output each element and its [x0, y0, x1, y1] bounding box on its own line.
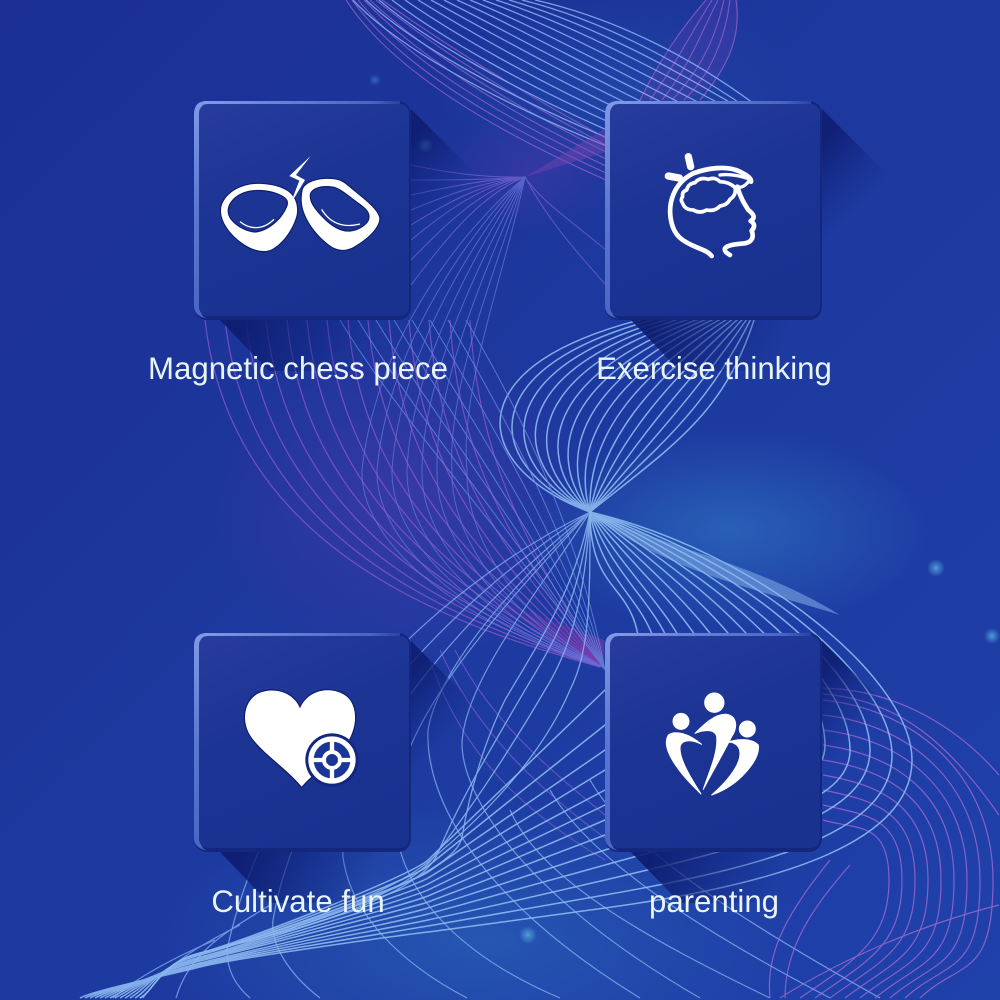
wave: top purple strands: [346, 0, 606, 180]
wave: top right purple loop: [640, 0, 738, 100]
card body: [605, 101, 822, 320]
card body: [605, 633, 822, 852]
wave: pink lower-right arcs: [769, 688, 999, 998]
wave: lower purple crossing: [430, 650, 605, 860]
icon: family of three: [666, 693, 759, 795]
wave: lower-right strands: [80, 512, 912, 998]
card: parenting: [605, 633, 890, 923]
card: exercise thinking: [605, 101, 890, 391]
label: magnetic chess piece: Magnetic chess piece: [148, 351, 448, 386]
wave: knot fan into bundle: [140, 512, 590, 998]
wave: upper knot fan: [411, 165, 606, 285]
wave: purple fan: [205, 320, 600, 667]
card: cultivate fun: [194, 633, 479, 923]
wave: upper purple knot: [525, 128, 606, 177]
icon: heart with wheel: [245, 690, 359, 787]
wave: lens strands: [500, 300, 760, 512]
wave: crossing strands: [340, 320, 605, 670]
card shadow: [630, 109, 890, 391]
label: exercise thinking: Exercise thinking: [596, 351, 832, 386]
wave: lower fan arcs: [113, 512, 880, 998]
wave: top blue strands: [353, 0, 757, 147]
icon: head with brain: [668, 157, 754, 256]
label: cultivate fun: Cultivate fun: [211, 884, 385, 919]
wave: purple tip: [470, 590, 604, 668]
label: parenting: parenting: [649, 884, 779, 919]
card body: [194, 101, 411, 320]
card shadow: [630, 641, 890, 923]
card: magnetic chess piece: [194, 101, 479, 391]
wave: left S ribbon: [362, 177, 605, 668]
icon: two magnetic chess pieces: [221, 156, 379, 251]
wave: bright band: [590, 512, 840, 615]
card body: [194, 633, 411, 852]
card shadow: [219, 109, 479, 391]
card shadow: [219, 641, 479, 923]
